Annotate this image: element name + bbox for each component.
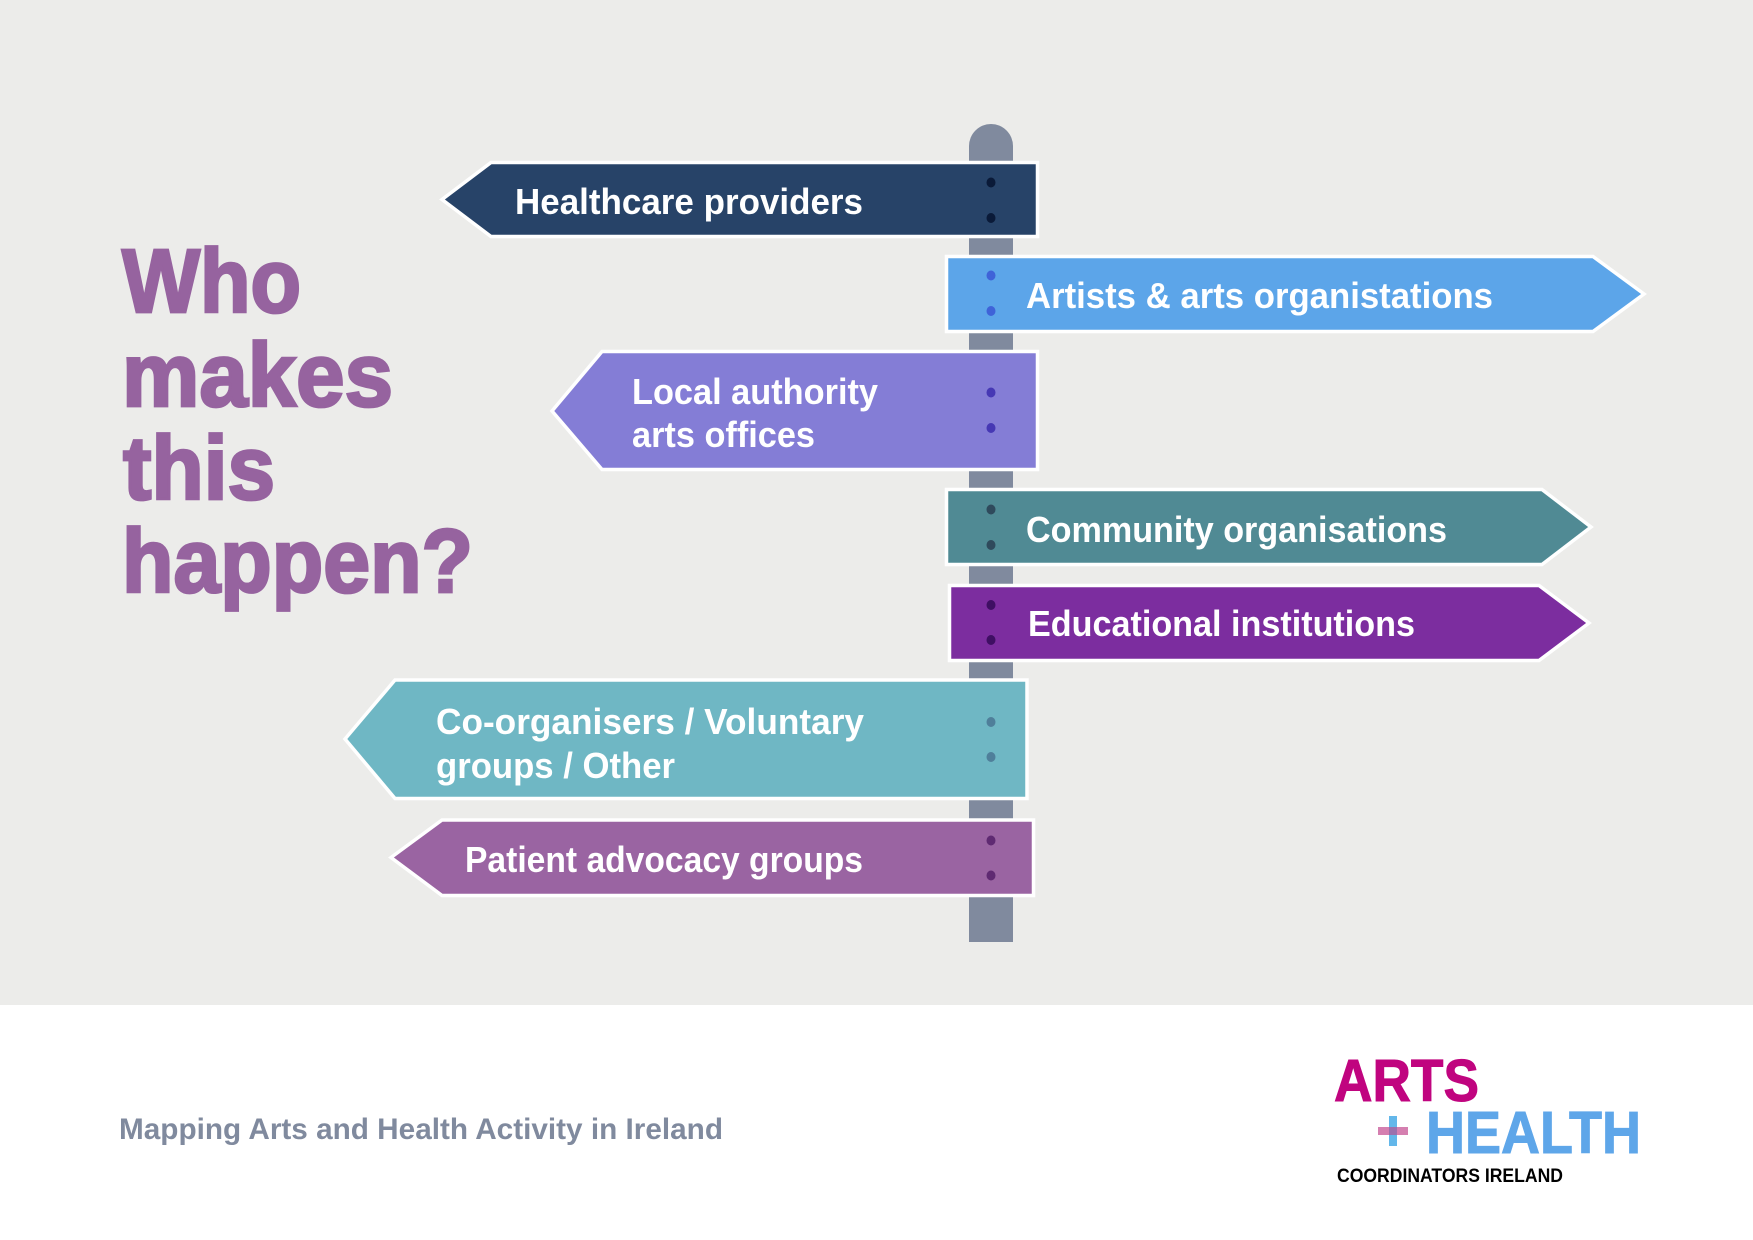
sign: Co-organisers, voluntary groups, other: Co-organisers / Voluntary (436, 701, 864, 742)
sign: Local authority arts offices: Local authority (632, 371, 878, 412)
logo: Arts + Health Coordinators Ireland: ARTS (1334, 1048, 1479, 1114)
sign: Co-organisers, voluntary groups, other (345, 680, 1027, 798)
sign: Local authority arts offices: arts offices (632, 414, 815, 455)
logo: Arts + Health Coordinators Ireland: COORDINATORS IRELAND (1337, 1166, 1563, 1187)
signpost pole (969, 124, 1013, 942)
footer caption: Mapping Arts and Health Activity in Ireland (119, 1113, 723, 1146)
sign: Healthcare providers (442, 162, 1038, 236)
sign: Artists and arts organistations (946, 256, 1644, 332)
sign: Educational institutions: Educational institutions (1028, 603, 1415, 644)
title: happen? (122, 512, 473, 612)
title: this (123, 419, 275, 519)
sign: Community organisations (946, 490, 1591, 564)
sign: Community organisations: Community organisations (1026, 509, 1447, 550)
icon: plus sign (1378, 1116, 1408, 1146)
sign: Patient advocacy groups (391, 820, 1034, 896)
logo: Arts + Health Coordinators Ireland: HEALTH (1426, 1100, 1641, 1166)
sign: Local authority arts offices (552, 352, 1038, 470)
sign: Healthcare providers: Healthcare providers (515, 181, 863, 222)
sign: Co-organisers, voluntary groups, other: groups / Other (436, 745, 675, 786)
title: makes (122, 326, 393, 426)
title: Who (122, 232, 301, 332)
sign: Patient advocacy groups: Patient advocacy groups (465, 839, 863, 880)
panel: white footer (0, 1005, 1753, 1240)
sign: Educational institutions (950, 586, 1589, 660)
logo: Arts + Health Coordinators Ireland (1334, 1048, 1641, 1187)
title (122, 232, 473, 612)
sign: Artists and arts organistations: Artists & arts organistations (1026, 275, 1493, 316)
